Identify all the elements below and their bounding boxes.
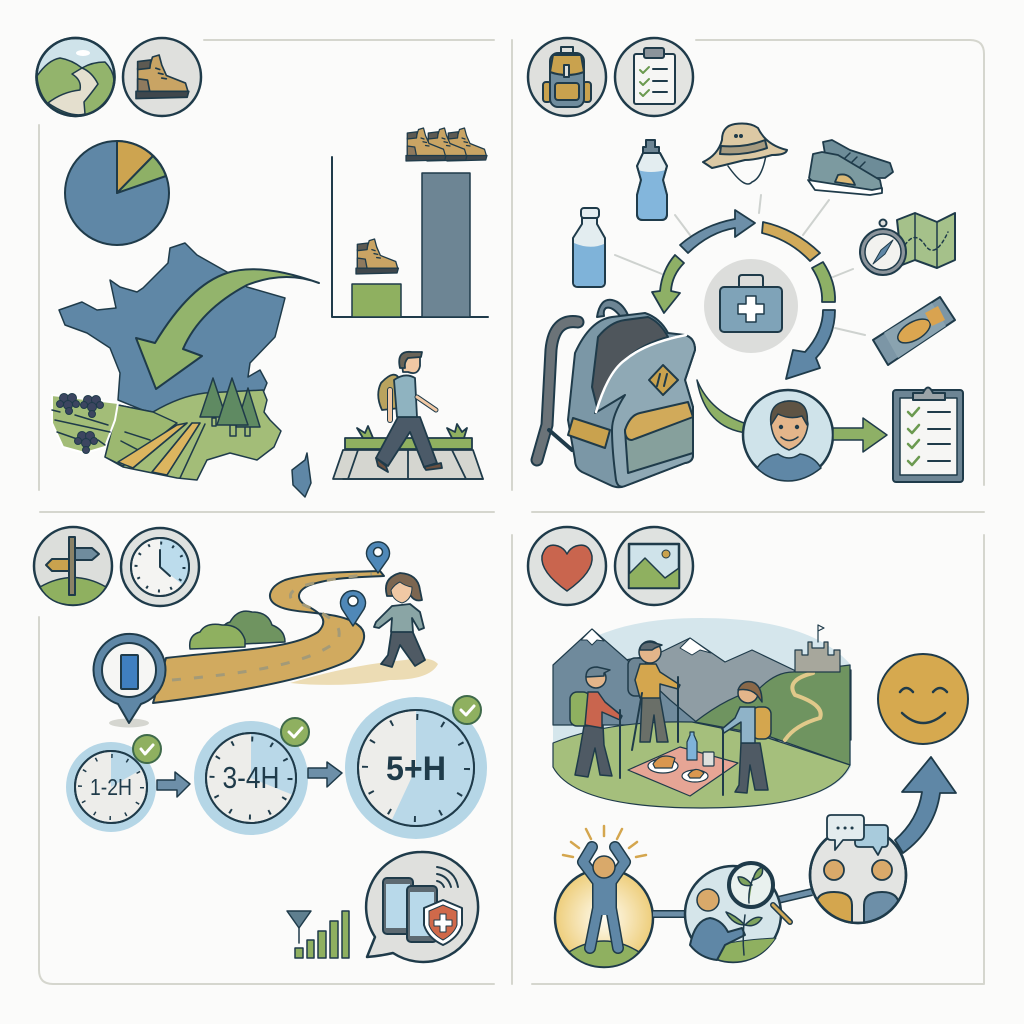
arrow: green sweep [136, 269, 319, 389]
icon: snack bar [873, 297, 955, 365]
icon: start marker [94, 634, 166, 728]
arrow: to clipboard [833, 418, 887, 452]
illustration: scene [553, 618, 851, 808]
map: France [59, 243, 285, 415]
arrow: upward [895, 757, 956, 853]
clock: 1-2H [66, 735, 161, 832]
illustration: hiker [374, 573, 425, 667]
icon: phones and shield bubble [366, 852, 478, 962]
illustration: walker [333, 352, 483, 479]
icon: joyful person [555, 826, 653, 967]
connector lines [653, 892, 812, 914]
icon: top bottle [637, 140, 667, 220]
icon: boot [123, 38, 201, 116]
icon: person [743, 390, 833, 481]
icon: three boots [406, 128, 487, 161]
icon: picture [615, 527, 693, 605]
icon: bush [190, 611, 285, 649]
icon: left bottle [573, 208, 605, 287]
icon: signpost [34, 527, 112, 605]
icon: backpack [528, 38, 606, 116]
illustration: hiker group [570, 641, 771, 795]
icon: compass and map [860, 213, 955, 275]
icon: speech bubbles [827, 815, 888, 855]
icon: first aid kit [704, 259, 798, 353]
panel: duration [34, 527, 487, 962]
panel: terrain [36, 38, 488, 497]
icon: landscape path [36, 38, 114, 116]
icon: boot on bar [356, 239, 398, 274]
vineyard [52, 394, 118, 454]
clock: 1-2H: 1-2H [90, 774, 132, 800]
icon: heart [528, 527, 606, 605]
icon: checklist [615, 38, 693, 116]
clock: 3-4H [194, 718, 309, 835]
bar chart [332, 157, 488, 317]
clock: 3-4H: 3-4H [222, 760, 280, 795]
map: southern France landscape [52, 378, 281, 480]
icon: clock [121, 528, 199, 606]
cycle diagram [615, 195, 865, 379]
icon: nature observation [685, 863, 790, 962]
icon: signal bars [287, 911, 349, 958]
icon: smiley [878, 654, 968, 744]
pie chart [65, 141, 169, 245]
panel: gear [528, 38, 963, 487]
hiker three [722, 682, 771, 795]
icon: two people chatting [808, 836, 908, 924]
icon: upper map pin [366, 542, 390, 573]
arrow: curve to person [697, 380, 747, 433]
trees [200, 378, 260, 436]
panel: reasons [528, 527, 968, 967]
hiker one [570, 667, 622, 778]
icon: shoes [808, 140, 893, 195]
arrow: second step [308, 762, 342, 787]
clock: 5+H [345, 696, 487, 839]
illustration: large backpack [537, 300, 695, 487]
icon: lower map pin [340, 591, 365, 626]
icon: clipboard [893, 388, 963, 482]
clock: 5+H: 5+H [386, 750, 446, 788]
road [153, 571, 438, 703]
icon: hat [703, 124, 787, 184]
arrow: first step [157, 772, 190, 797]
hiker two [628, 641, 680, 750]
icon: Corsica [292, 453, 311, 497]
